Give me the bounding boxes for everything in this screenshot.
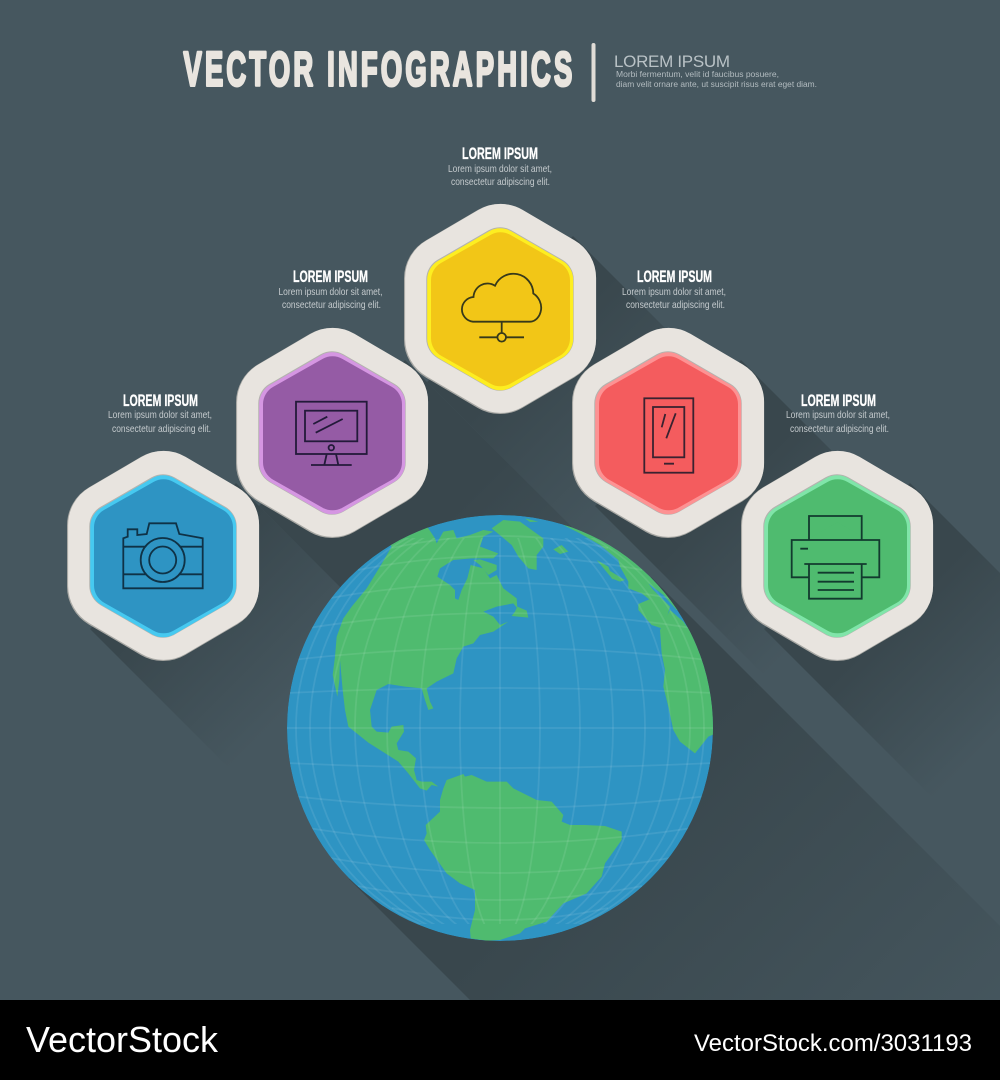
icon: monitor [296, 402, 367, 465]
subtitle block: Morbi fermentum, velit id faucibus posuere, [616, 69, 779, 79]
panel: monitor hexagon [280, 371, 385, 494]
title divider [592, 43, 596, 102]
subtitle block [614, 52, 817, 89]
label: printer: consectetur adipiscing elit. [790, 423, 889, 435]
hexagon base: printer [785, 494, 890, 617]
panel: camera hexagon [111, 494, 216, 617]
icon: printer [792, 516, 879, 599]
label: printer [786, 392, 890, 435]
label: printer: Lorem ipsum dolor sit amet, [786, 409, 890, 421]
icon: cloud network [462, 274, 541, 342]
label: cloud: consectetur adipiscing elit. [451, 176, 550, 188]
label: cloud: Lorem ipsum dolor sit amet, [448, 163, 552, 175]
label: monitor: consectetur adipiscing elit. [282, 299, 381, 311]
ocean [287, 515, 713, 941]
footer logo: VectorStock [26, 1019, 219, 1060]
icon: phone [644, 398, 693, 473]
label: cloud [448, 145, 552, 188]
label: phone [622, 268, 726, 311]
panel: printer hexagon [785, 494, 890, 617]
label: camera [108, 392, 212, 435]
label: monitor: Lorem ipsum dolor sit amet, [278, 286, 382, 298]
subtitle block: LOREM IPSUM [614, 52, 730, 71]
icon: camera [123, 523, 203, 588]
footer bar [0, 1000, 1000, 1080]
panel: phone hexagon [616, 371, 721, 494]
subtitle block: diam velit ornare ante, ut suscipit risus erat eget diam. [616, 79, 817, 89]
hexagon base: cloud [448, 247, 553, 370]
label: monitor: LOREM IPSUM [293, 268, 368, 286]
title: VECTOR INFOGRAPHICS [184, 44, 572, 97]
label: camera: LOREM IPSUM [123, 392, 198, 410]
label: phone: LOREM IPSUM [637, 268, 712, 286]
label: printer: LOREM IPSUM [801, 392, 876, 410]
hexagon base: camera [111, 494, 216, 617]
label: phone: Lorem ipsum dolor sit amet, [622, 286, 726, 298]
long shadows [90, 236, 1000, 1000]
label: camera: consectetur adipiscing elit. [112, 423, 211, 435]
label: camera: Lorem ipsum dolor sit amet, [108, 409, 212, 421]
hexagon base: monitor [280, 371, 385, 494]
continents [333, 517, 723, 941]
globe [285, 515, 723, 941]
hexagon base: phone [616, 371, 721, 494]
panel: cloud hexagon [448, 247, 553, 370]
graticule [285, 515, 715, 941]
label: monitor [278, 268, 382, 311]
footer url: VectorStock.com/3031193 [694, 1030, 972, 1057]
label: cloud: LOREM IPSUM [462, 145, 538, 163]
label: phone: consectetur adipiscing elit. [626, 299, 725, 311]
